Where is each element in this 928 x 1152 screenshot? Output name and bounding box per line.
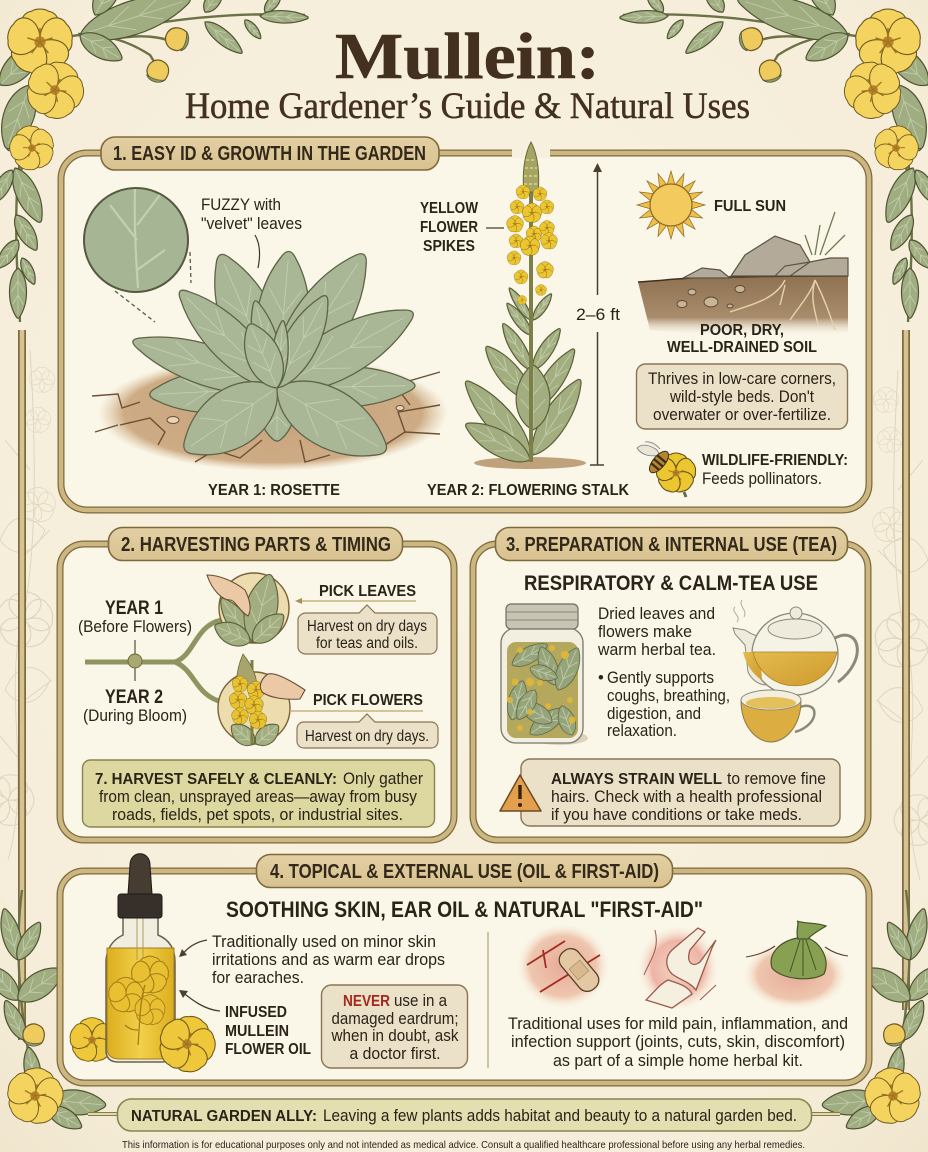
infused oil label with arrow: INFUSED (225, 1004, 287, 1021)
disclaimer: This information is for educational purposes only and not intended as medical advice. Consult a qualified healthcare professional before using any herbal remedies. (122, 1139, 805, 1151)
wildlife label (702, 452, 848, 488)
harvest safely callout: roads, fields, pet spots, or industrial sites. (112, 806, 403, 824)
illustration: picking flowers (218, 654, 305, 751)
oil use text with arrow: Traditionally used on minor skin (212, 933, 436, 951)
soil label (667, 322, 817, 356)
infused oil label with arrow: MULLEIN (225, 1023, 289, 1040)
traditional uses text: as part of a simple home herbal kit. (553, 1052, 803, 1070)
soil label: WELL-DRAINED SOIL (667, 339, 817, 356)
icon: sun (637, 171, 705, 239)
section heading pill 3 (496, 528, 848, 560)
harvest safely callout (82, 760, 434, 827)
magnified leaf detail (84, 188, 191, 322)
icon: cut with bandage (517, 924, 609, 1008)
pick flowers label: PICK FLOWERS (313, 692, 423, 709)
infused oil label with arrow (179, 990, 311, 1058)
fuzzy leaves label (201, 196, 302, 268)
flower spike label: YELLOW (420, 200, 479, 217)
care note box: overwater or over-fertilize. (653, 406, 831, 424)
height arrow (576, 163, 620, 465)
illustration: cracked soil (92, 355, 448, 471)
eardrum warning box (322, 985, 468, 1068)
illustration: cup of tea (741, 690, 814, 742)
soil label: POOR, DRY, (700, 322, 784, 339)
natural garden ally banner: NATURAL GARDEN ALLY: (131, 1108, 317, 1125)
natural garden ally banner: Leaving a few plants adds habitat and beauty to a natural garden bed. (323, 1107, 797, 1125)
harvest safely callout: from clean, unsprayed areas—away from busy (99, 788, 418, 806)
warning callout: hairs. Check with a health professional (551, 788, 822, 806)
warning callout: ALWAYS STRAIN WELL (551, 771, 722, 788)
traditional uses text: Traditional uses for mild pain, inflammation, and (508, 1015, 848, 1033)
section heading pill 2 (108, 528, 402, 560)
traditional uses text (508, 1015, 848, 1070)
pick flowers label (290, 692, 423, 711)
corner floral top right (620, 0, 928, 322)
warning callout (500, 759, 840, 826)
corner floral bottom left (0, 890, 107, 1135)
year 2 label (83, 687, 187, 725)
warning callout: to remove fine (727, 770, 826, 788)
oil use text with arrow: irritations and as warm ear drops (212, 951, 445, 969)
warning callout: if you have conditions or take meds. (551, 806, 802, 824)
leaf harvest note (298, 605, 437, 654)
corner floral top left (0, 0, 308, 322)
care note box: Thrives in low-care corners, (648, 370, 836, 388)
year 1 label: (Before Flowers) (78, 618, 192, 636)
herbal tea text (597, 605, 716, 659)
traditional uses text: infection support (joints, cuts, skin, discomfort) (511, 1033, 845, 1051)
illustration: year 2 flowering stalk (456, 142, 591, 471)
section heading pill 2: 2. HARVESTING PARTS & TIMING (121, 533, 391, 556)
tea benefits bullet (598, 669, 730, 740)
eardrum warning box: use in a (394, 992, 448, 1010)
eardrum warning box: NEVER (343, 993, 390, 1010)
illustration: year 1 rosette leaves (127, 239, 425, 476)
wildlife label: Feeds pollinators. (702, 470, 822, 488)
flower spike label (420, 200, 504, 255)
leaf harvest note: Harvest on dry days (307, 618, 427, 635)
topical subheading: SOOTHING SKIN, EAR OIL & NATURAL "FIRST-AID" (226, 897, 703, 922)
eardrum warning box: when in doubt, ask (331, 1027, 459, 1045)
tea subheading: RESPIRATORY & CALM-TEA USE (524, 571, 818, 595)
icon: warning triangle (500, 775, 541, 811)
year 2 label: (During Bloom) (83, 707, 187, 725)
fuzzy leaves label: "velvet" leaves (201, 215, 302, 233)
fuzzy leaves label: FUZZY with (201, 196, 281, 214)
herbal tea text: flowers make (598, 623, 692, 641)
section heading pill 3: 3. PREPARATION & INTERNAL USE (TEA) (506, 533, 837, 556)
panel 4: topical and external use (60, 854, 869, 1085)
herbal tea text: Dried leaves and (598, 605, 715, 623)
illustration: teapot (733, 600, 857, 695)
oil use text with arrow: for earaches. (212, 969, 304, 987)
section heading pill 1 (101, 137, 439, 170)
pick leaves label: PICK LEAVES (319, 583, 416, 600)
tea benefits bullet: Gently supports (607, 669, 714, 687)
height arrow: 2–6 ft (576, 306, 620, 324)
tea benefits bullet: • (598, 669, 604, 687)
flower harvest note: Harvest on dry days. (305, 728, 429, 745)
corner floral bottom right (821, 890, 928, 1135)
faint botanical line art, right margin (870, 370, 928, 880)
eardrum warning box: a doctor first. (350, 1045, 440, 1063)
title: Mullein: (335, 20, 600, 93)
flower spike label: SPIKES (423, 238, 475, 255)
panel 2: harvesting parts and timing (60, 528, 454, 840)
year 1 label (78, 598, 192, 636)
wildlife label: WILDLIFE-FRIENDLY: (702, 452, 848, 469)
illustration: poor dry soil with rocks and roots (638, 212, 848, 335)
oil use text with arrow (179, 933, 445, 987)
illustration: jar of dried herbs (501, 604, 588, 745)
icon: inflamed joint (638, 926, 718, 1010)
flower spike label: FLOWER (420, 219, 478, 236)
year 2 label: YEAR 2 (105, 687, 163, 708)
section heading pill 4: 4. TOPICAL & EXTERNAL USE (OIL & FIRST-AID) (270, 860, 659, 883)
illustration: picking leaves (207, 571, 290, 652)
branching timeline (85, 620, 240, 702)
infused oil label with arrow: FLOWER OIL (225, 1041, 311, 1058)
flower harvest note (297, 714, 438, 748)
year 1 caption: YEAR 1: ROSETTE (208, 482, 340, 499)
section heading pill 4 (256, 854, 672, 888)
year 1 label: YEAR 1 (105, 598, 163, 619)
harvest safely callout: 7. HARVEST SAFELY & CLEANLY: (95, 771, 337, 788)
tea benefits bullet: coughs, breathing, (607, 687, 730, 705)
side rail right (902, 330, 910, 1010)
panel 1: easy ID and growth (61, 137, 869, 510)
eardrum warning box: damaged eardrum; (332, 1010, 458, 1028)
panel 3: preparation and internal use (473, 528, 868, 840)
illustration: dropper bottle of infused oil (67, 854, 226, 1085)
icon: herbal poultice (743, 921, 848, 1009)
faint botanical line art, left margin (0, 350, 58, 860)
care note box (636, 364, 848, 429)
tea benefits bullet: relaxation. (607, 722, 677, 740)
leaf harvest note: for teas and oils. (316, 635, 418, 652)
section heading pill 1: 1. EASY ID & GROWTH IN THE GARDEN (113, 142, 426, 165)
care note box: wild-style beds. Don't (669, 388, 814, 406)
full sun label: FULL SUN (714, 198, 786, 215)
pick leaves label (295, 583, 416, 604)
subtitle: Home Gardener’s Guide & Natural Uses (185, 86, 750, 127)
year 2 caption: YEAR 2: FLOWERING STALK (427, 482, 629, 499)
natural garden ally banner (88, 1099, 840, 1131)
icon: bee on flower (637, 442, 698, 497)
harvest safely callout: Only gather (343, 770, 423, 788)
side rail left (18, 330, 26, 1040)
tea benefits bullet: digestion, and (607, 705, 701, 723)
herbal tea text: warm herbal tea. (597, 641, 716, 659)
